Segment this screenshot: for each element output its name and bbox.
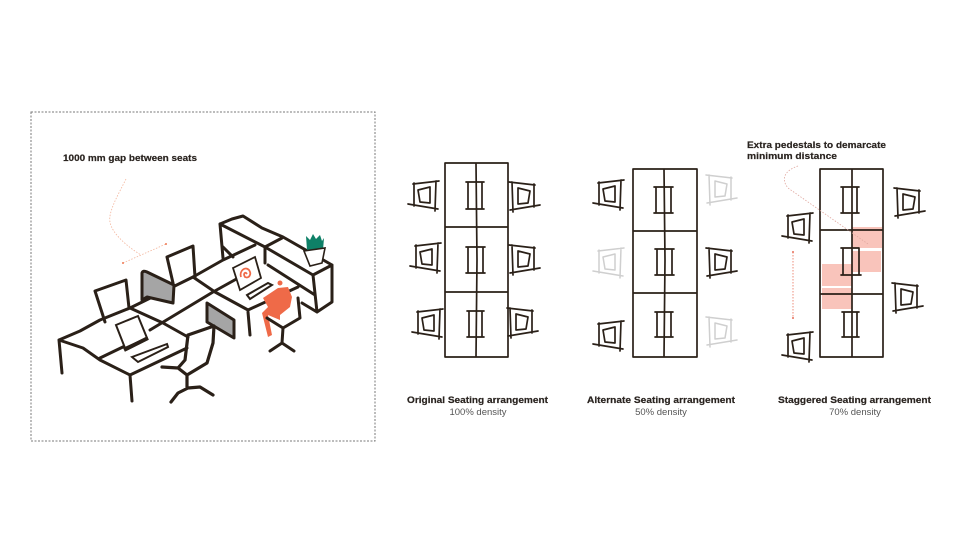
caption: Alternate Seating arrangement <box>587 395 736 406</box>
desks <box>59 245 298 401</box>
seats removed <box>593 175 737 347</box>
panel: staggered seating <box>747 140 932 418</box>
chair backs <box>95 246 195 322</box>
heading: extra pedestals: Extra pedestals to demarcate <box>747 140 886 151</box>
laptop with orange spiral <box>233 257 261 290</box>
seats active <box>593 180 737 351</box>
keyboard front <box>132 344 168 362</box>
panel: original seating <box>407 163 549 418</box>
laptop front <box>116 316 148 350</box>
heading: extra pedestals: minimum distance <box>747 151 837 162</box>
seats <box>408 181 540 339</box>
chair back desk <box>267 298 300 351</box>
chair front desk <box>162 326 214 402</box>
caption: Staggered Seating arrangement <box>778 395 932 406</box>
keyboard back <box>247 283 272 299</box>
table plan <box>633 169 697 357</box>
person <box>262 280 292 337</box>
table plan <box>820 169 883 357</box>
caption: 70% density <box>829 407 881 418</box>
dashed frame <box>31 112 375 441</box>
heading: gap between seats: 1000 mm gap between seats <box>63 153 197 164</box>
caption: 100% density <box>449 407 507 418</box>
gray divider small <box>207 303 234 338</box>
gray divider large <box>142 271 174 303</box>
caption <box>407 395 549 418</box>
arrow: pedestal callout <box>784 166 868 244</box>
caption <box>778 395 932 418</box>
arrow: gap callout <box>110 179 167 264</box>
panel: isometric workstation <box>31 112 375 441</box>
heading: extra pedestals <box>747 140 886 162</box>
caption <box>587 395 736 418</box>
caption: 50% density <box>635 407 687 418</box>
caption: Original Seating arrangement <box>407 395 549 406</box>
arrow: staggered distance <box>792 251 794 319</box>
table plan <box>445 163 508 357</box>
icon: plant <box>304 234 325 266</box>
extra pedestals highlight <box>822 227 882 309</box>
panel: alternate seating <box>587 169 737 418</box>
seats <box>782 188 925 362</box>
credenza with plant <box>220 216 332 312</box>
